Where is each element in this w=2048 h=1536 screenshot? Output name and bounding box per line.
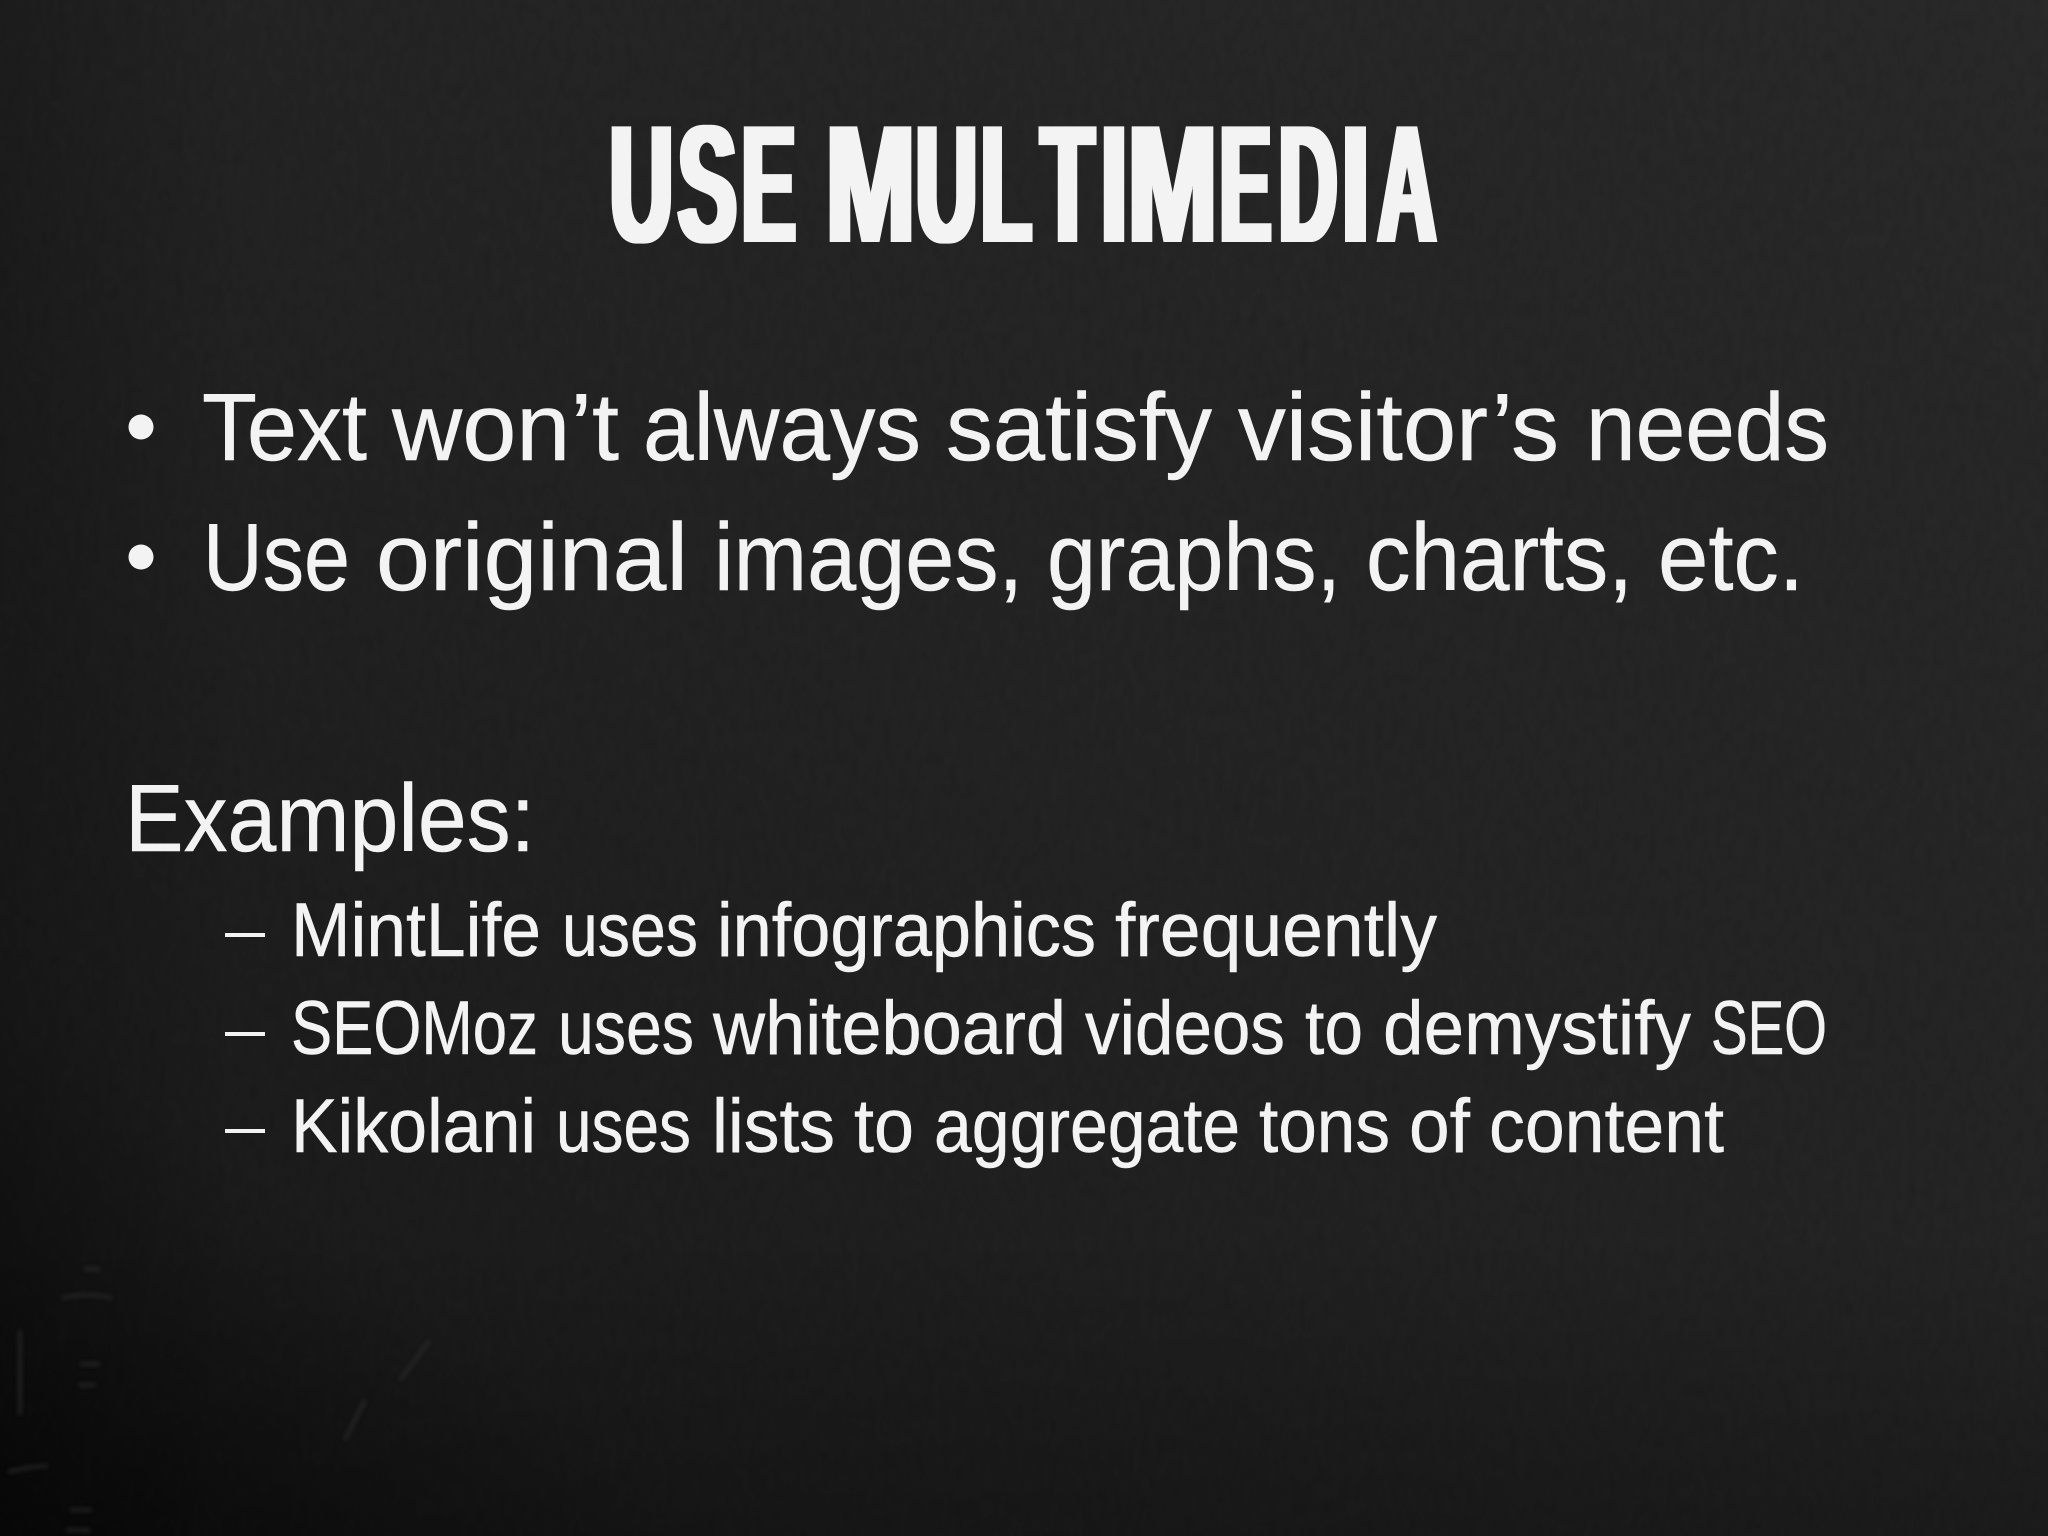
- title: E: [1220, 90, 1271, 278]
- example: MintLife: uses: [562, 888, 698, 973]
- title: I: [1342, 90, 1369, 278]
- examples list: [225, 888, 1827, 1169]
- example: Kikolani: [225, 1084, 1724, 1169]
- example: SEOMoz: videos: [1085, 986, 1285, 1071]
- example: Kikolani: Kikolani: [291, 1084, 536, 1169]
- title: U: [916, 90, 977, 278]
- title: [610, 90, 1436, 278]
- bullet point 1: visitor’s: [1238, 374, 1559, 481]
- example: Kikolani: lists: [712, 1084, 835, 1169]
- example: MintLife: infographics: [717, 888, 1096, 973]
- bullet point 1: Text: [202, 374, 367, 481]
- example: SEOMoz: demystify: [1383, 986, 1691, 1071]
- examples heading: Examples:: [125, 765, 535, 872]
- bullet point 1: [128, 374, 1829, 481]
- bullet point 2: images,: [714, 504, 1023, 611]
- title: M: [1128, 90, 1217, 278]
- example: SEOMoz: uses: [558, 986, 694, 1071]
- bullet point 2: original: [376, 504, 688, 611]
- title: I: [1101, 90, 1127, 278]
- bullet point 1: satisfy: [946, 374, 1212, 481]
- example: Kikolani: uses: [556, 1084, 691, 1169]
- example: SEOMoz: whiteboard: [712, 986, 1066, 1071]
- bullet point 1: needs: [1586, 374, 1829, 481]
- title: L: [981, 90, 1032, 278]
- title: T: [1041, 90, 1094, 278]
- title: U: [610, 90, 673, 278]
- example: SEOMoz: SEOMoz: [291, 986, 538, 1071]
- example: Kikolani: of: [1409, 1084, 1471, 1169]
- bullet list: main points: [128, 374, 1829, 611]
- example: MintLife: frequently: [1115, 888, 1437, 973]
- bullet point 2: graphs,: [1047, 504, 1341, 611]
- example: MintLife: MintLife: [291, 888, 541, 973]
- bullet point 2: charts,: [1366, 504, 1633, 611]
- title: S: [678, 90, 737, 278]
- title: E: [742, 90, 796, 278]
- example: Kikolani: content: [1489, 1084, 1724, 1169]
- example: Kikolani: to: [854, 1084, 914, 1169]
- title: D: [1279, 90, 1337, 278]
- bullet point 1: always: [643, 374, 921, 481]
- bullet point 2: etc.: [1658, 504, 1804, 611]
- bullet point 2: [128, 504, 1804, 611]
- example: SEOMoz: [225, 986, 1827, 1071]
- example: SEOMoz: SEO: [1711, 986, 1827, 1071]
- example: SEOMoz: to: [1305, 986, 1363, 1071]
- title: M: [826, 90, 915, 278]
- example: Kikolani: aggregate: [934, 1084, 1240, 1169]
- example: MintLife: [225, 888, 1437, 973]
- bullet point 1: won’t: [391, 374, 619, 481]
- example: Kikolani: tons: [1259, 1084, 1390, 1169]
- text: A: [1378, 90, 1436, 278]
- bullet point 2: Use: [203, 504, 350, 611]
